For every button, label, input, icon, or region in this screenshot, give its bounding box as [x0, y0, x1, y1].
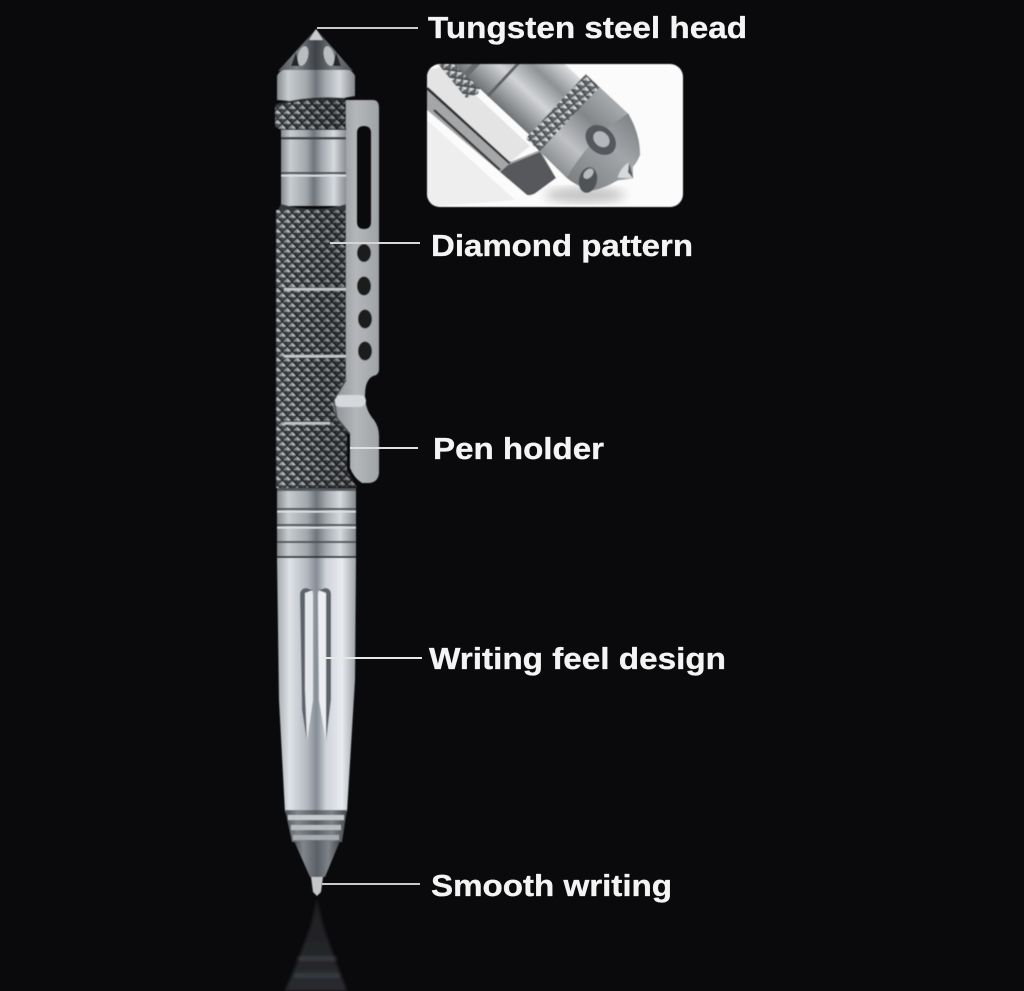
callout: Tungsten steel head: Tungsten steel head — [428, 10, 747, 45]
pen holder clip — [333, 100, 379, 483]
inset photo: head close-up — [426, 63, 684, 208]
callout: Pen holder: Pen holder — [433, 431, 604, 466]
pen reflection — [285, 898, 347, 991]
inset cone — [566, 114, 641, 191]
writing tip — [311, 877, 323, 896]
pen head: tungsten tip cone and collar — [277, 29, 355, 101]
callout: Writing feel design: Writing feel design — [429, 641, 726, 676]
inset upper knurl — [438, 63, 480, 98]
nose rings — [285, 810, 347, 842]
inset body — [454, 63, 581, 136]
cylindrical neck with grooves — [276, 130, 347, 214]
inset background shading — [427, 120, 515, 207]
inset clip plate — [427, 66, 530, 162]
finger grooves — [300, 588, 331, 742]
nose cone — [294, 841, 340, 877]
callout: Diamond pattern: Diamond pattern — [431, 228, 693, 263]
callout: Smooth writing: Smooth writing — [431, 868, 672, 903]
inset knurled ring — [526, 74, 600, 152]
diamond pattern grip — [276, 210, 357, 488]
inset collar — [539, 87, 630, 180]
inset clip frame — [426, 90, 554, 175]
ribbed grip section — [277, 488, 356, 558]
knurled ring — [275, 98, 346, 130]
clip holes — [357, 244, 372, 360]
pen — [275, 29, 379, 896]
barrel with finger grooves — [277, 558, 356, 812]
